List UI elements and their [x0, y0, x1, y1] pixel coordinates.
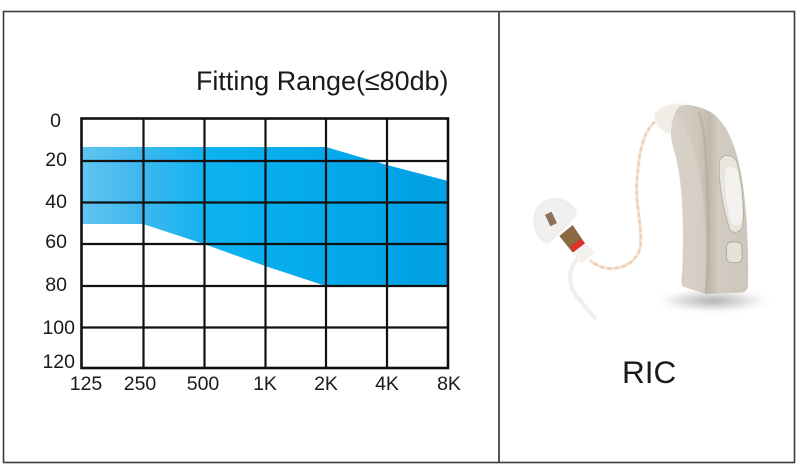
x axis labels: 1K: [253, 373, 277, 395]
wire: [590, 122, 655, 269]
y axis labels: 120: [42, 351, 75, 373]
receiver connector: [573, 243, 595, 263]
body bevel shade: [698, 112, 708, 293]
y axis labels: 100: [42, 317, 75, 339]
y axis labels: 0: [50, 110, 61, 132]
y axis labels: 80: [45, 274, 67, 296]
y axis labels: 20: [45, 149, 67, 171]
y axis labels: [42, 110, 75, 373]
label: RIC: RIC: [622, 354, 676, 390]
heading: fitting range: Fitting Range(≤80db): [196, 66, 448, 96]
program button: [727, 242, 742, 263]
chart grid: [82, 118, 448, 368]
volume rocker: [725, 167, 742, 225]
volume rocker surround: [719, 155, 743, 232]
audiogram chart: [42, 110, 461, 395]
icon: RIC hearing aid: [534, 104, 772, 319]
x axis labels: 500: [187, 373, 219, 395]
x axis labels: 4K: [375, 373, 399, 395]
device cap: [654, 104, 687, 134]
x axis labels: 250: [124, 373, 156, 395]
retention tail: [570, 258, 596, 319]
body bevel highlight: [671, 113, 706, 292]
x axis labels: 2K: [314, 373, 338, 395]
x axis labels: [70, 373, 461, 395]
y axis labels: 60: [45, 231, 67, 253]
receiver: [559, 225, 585, 253]
x axis labels: 8K: [437, 373, 461, 395]
receiver red band: [570, 239, 585, 252]
y axis labels: 40: [45, 191, 67, 213]
x axis labels: 125: [70, 373, 102, 395]
device body: [671, 105, 748, 294]
panel divider: [498, 11, 500, 462]
ground shadow: [655, 289, 772, 313]
fitting range area: [82, 147, 448, 286]
ear dome: [534, 199, 576, 243]
speaker coil: [545, 212, 557, 226]
